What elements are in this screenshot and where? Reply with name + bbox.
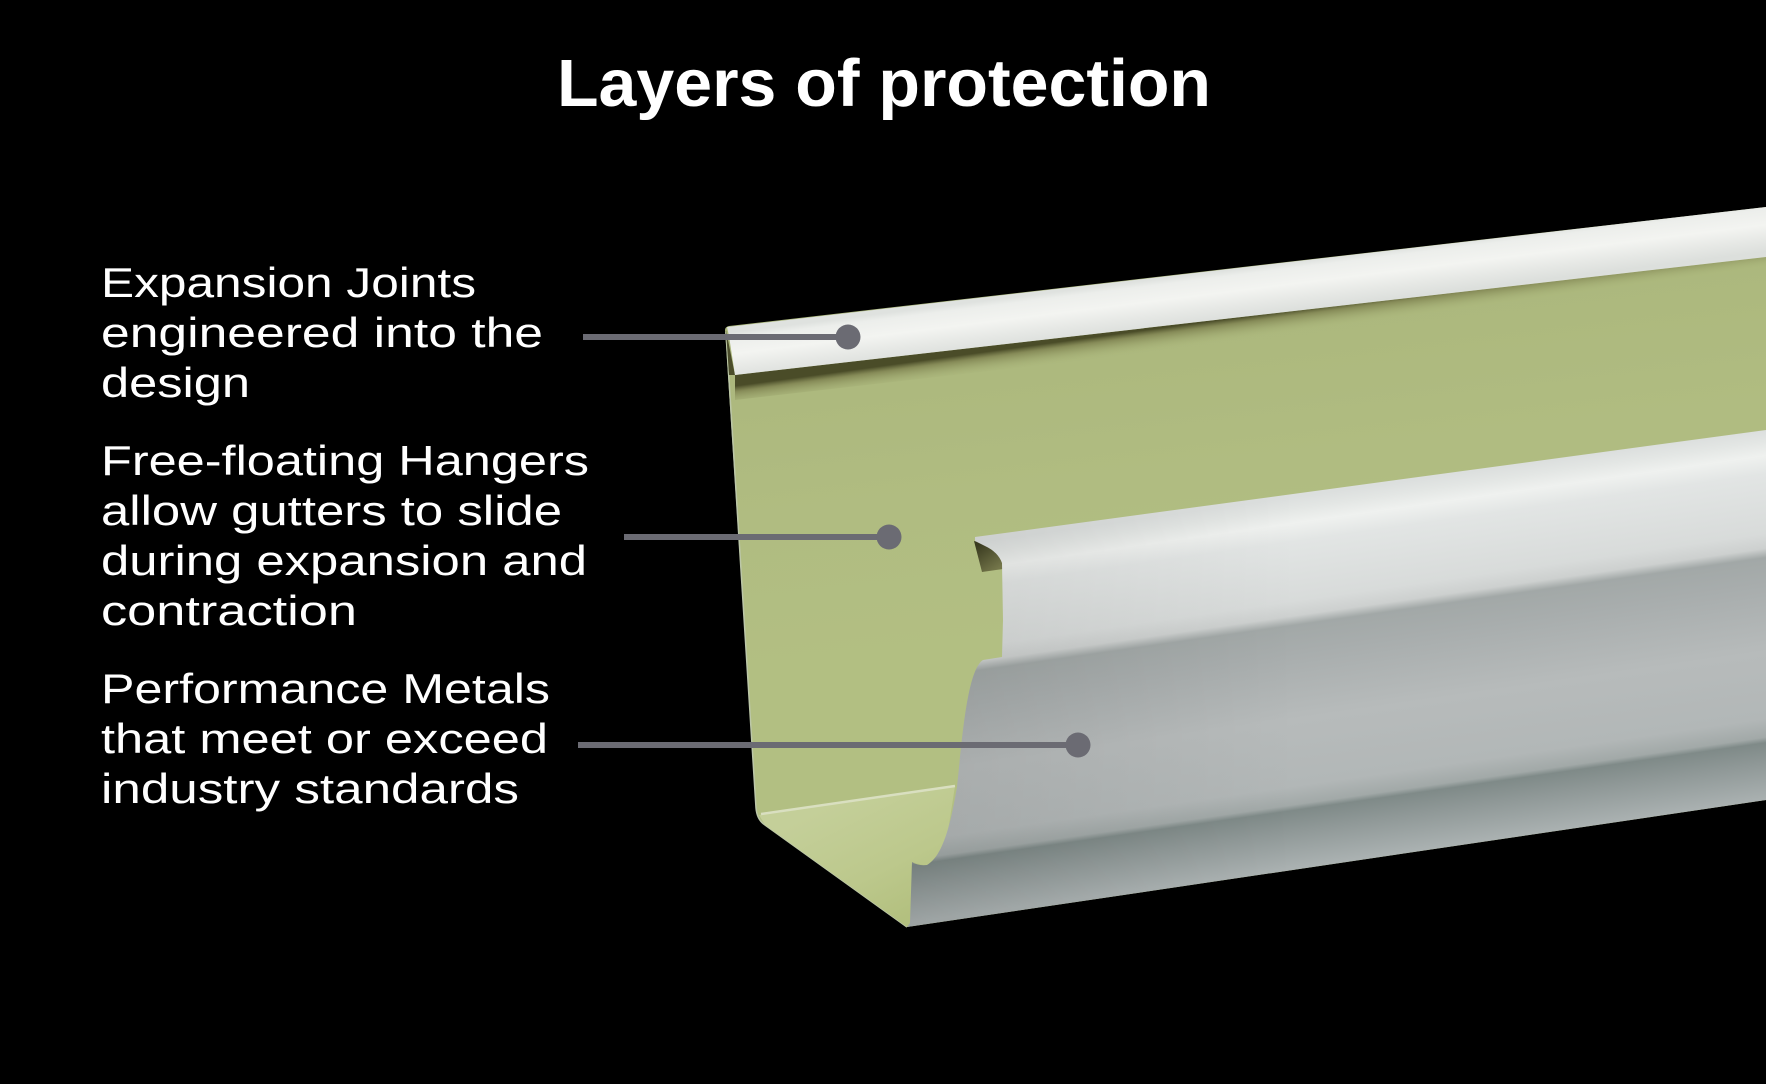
gutter floor — [759, 786, 955, 927]
gutter back wall — [725, 207, 1766, 927]
gutter illustration — [725, 207, 1766, 927]
text block: performance metals: Performance Metals — [101, 665, 550, 712]
top lip inner shadow — [726, 330, 735, 375]
front face shading — [907, 430, 1766, 927]
text block: expansion joints — [101, 259, 543, 406]
text block: performance metals: industry standards — [101, 765, 519, 812]
gutter wall edge highlight — [726, 332, 907, 927]
gutter front face — [907, 430, 1766, 927]
top lip — [727, 207, 1766, 375]
text block: free-floating hangers: during expansion and — [101, 537, 587, 584]
floor crease line — [761, 786, 955, 814]
text block: expansion joints: Expansion Joints — [101, 259, 476, 306]
text block: expansion joints: design — [101, 359, 250, 406]
text block: free-floating hangers: Free-floating Hangers — [101, 437, 589, 484]
front hook shadow — [974, 541, 1003, 572]
text block: performance metals — [101, 665, 550, 812]
callout line: performance metals — [578, 732, 1090, 758]
text block: expansion joints: engineered into the — [101, 309, 543, 356]
text block: free-floating hangers — [101, 437, 589, 634]
callout line: free-floating hangers — [624, 524, 902, 550]
title: Layers of protection — [557, 46, 1211, 121]
text block: performance metals: that meet or exceed — [101, 715, 548, 762]
wall shadow under top lip — [735, 257, 1766, 400]
callout line: expansion joints — [583, 324, 860, 350]
text block: free-floating hangers: contraction — [101, 587, 357, 634]
text block: free-floating hangers: allow gutters to slide — [101, 487, 562, 534]
